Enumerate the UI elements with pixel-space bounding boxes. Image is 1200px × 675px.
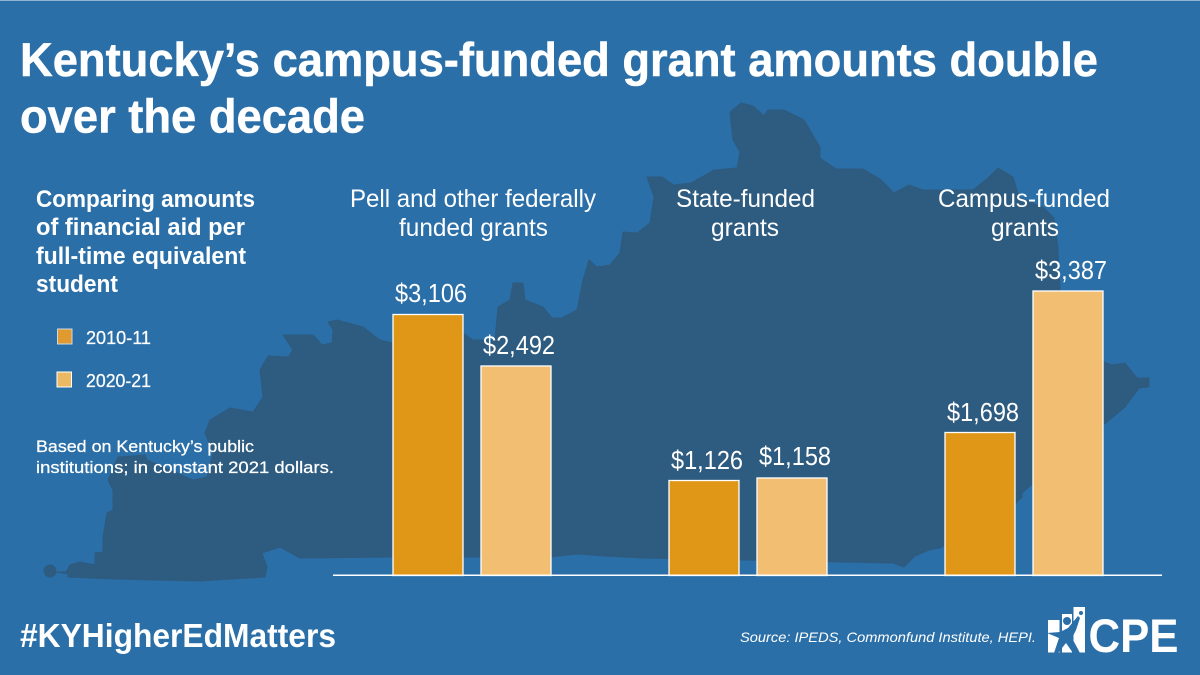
state 2010-11 bar: $1,126	[671, 447, 743, 475]
legend heading	[36, 186, 255, 298]
state 2020-21 bar	[757, 443, 831, 576]
heading: campus grants	[938, 185, 1110, 242]
bar chart	[393, 257, 1107, 576]
federal 2010-11 bar	[393, 280, 467, 576]
source: Source: IPEDS, Commonfund Institute, HEPI.	[740, 629, 1036, 645]
legend: 2010-11	[58, 328, 151, 348]
title	[20, 33, 1098, 142]
state 2010-11 bar	[669, 447, 743, 576]
logo: CPE: CPE	[1088, 609, 1178, 662]
note: Based on Kentucky’s public	[36, 437, 255, 456]
note	[36, 437, 334, 477]
heading: federal grants: Pell and other federally	[350, 185, 596, 213]
heading: federal grants	[350, 185, 596, 242]
legend heading: of financial aid per	[36, 214, 245, 241]
federal 2010-11 bar: $3,106	[395, 280, 467, 308]
hashtag: #KYHigherEdMatters	[20, 618, 336, 655]
heading: campus grants: Campus-funded	[938, 185, 1110, 213]
heading: state grants: grants	[711, 214, 779, 242]
title: over the decade	[20, 90, 365, 142]
note: institutions; in constant 2021 dollars.	[36, 458, 334, 477]
heading: campus grants: grants	[991, 214, 1059, 242]
logo: CPE	[1047, 607, 1178, 662]
federal 2020-21 bar	[481, 332, 555, 576]
legend: 2020-21: 2020-21	[86, 371, 151, 391]
campus 2010-11 bar: $1,698	[947, 399, 1019, 427]
campus 2020-21 bar: $3,387	[1035, 257, 1107, 285]
state 2020-21 bar: $1,158	[759, 443, 831, 471]
legend heading: Comparing amounts	[36, 186, 255, 213]
heading: state grants: State-funded	[676, 185, 815, 213]
campus 2020-21 bar	[1033, 257, 1107, 576]
legend heading: student	[36, 271, 118, 298]
campus 2010-11 bar	[945, 399, 1019, 576]
heading: state grants	[676, 185, 815, 242]
title: Kentucky’s campus-funded grant amounts double	[20, 33, 1098, 86]
federal 2020-21 bar: $2,492	[483, 332, 555, 360]
legend: 2020-21	[57, 371, 151, 391]
heading: federal grants: funded grants	[399, 214, 548, 242]
legend: 2010-11: 2010-11	[86, 328, 151, 348]
map: Kentucky silhouette	[44, 103, 1149, 581]
legend heading: full-time equivalent	[36, 243, 246, 270]
icon: rising bars with figure	[1047, 607, 1085, 653]
